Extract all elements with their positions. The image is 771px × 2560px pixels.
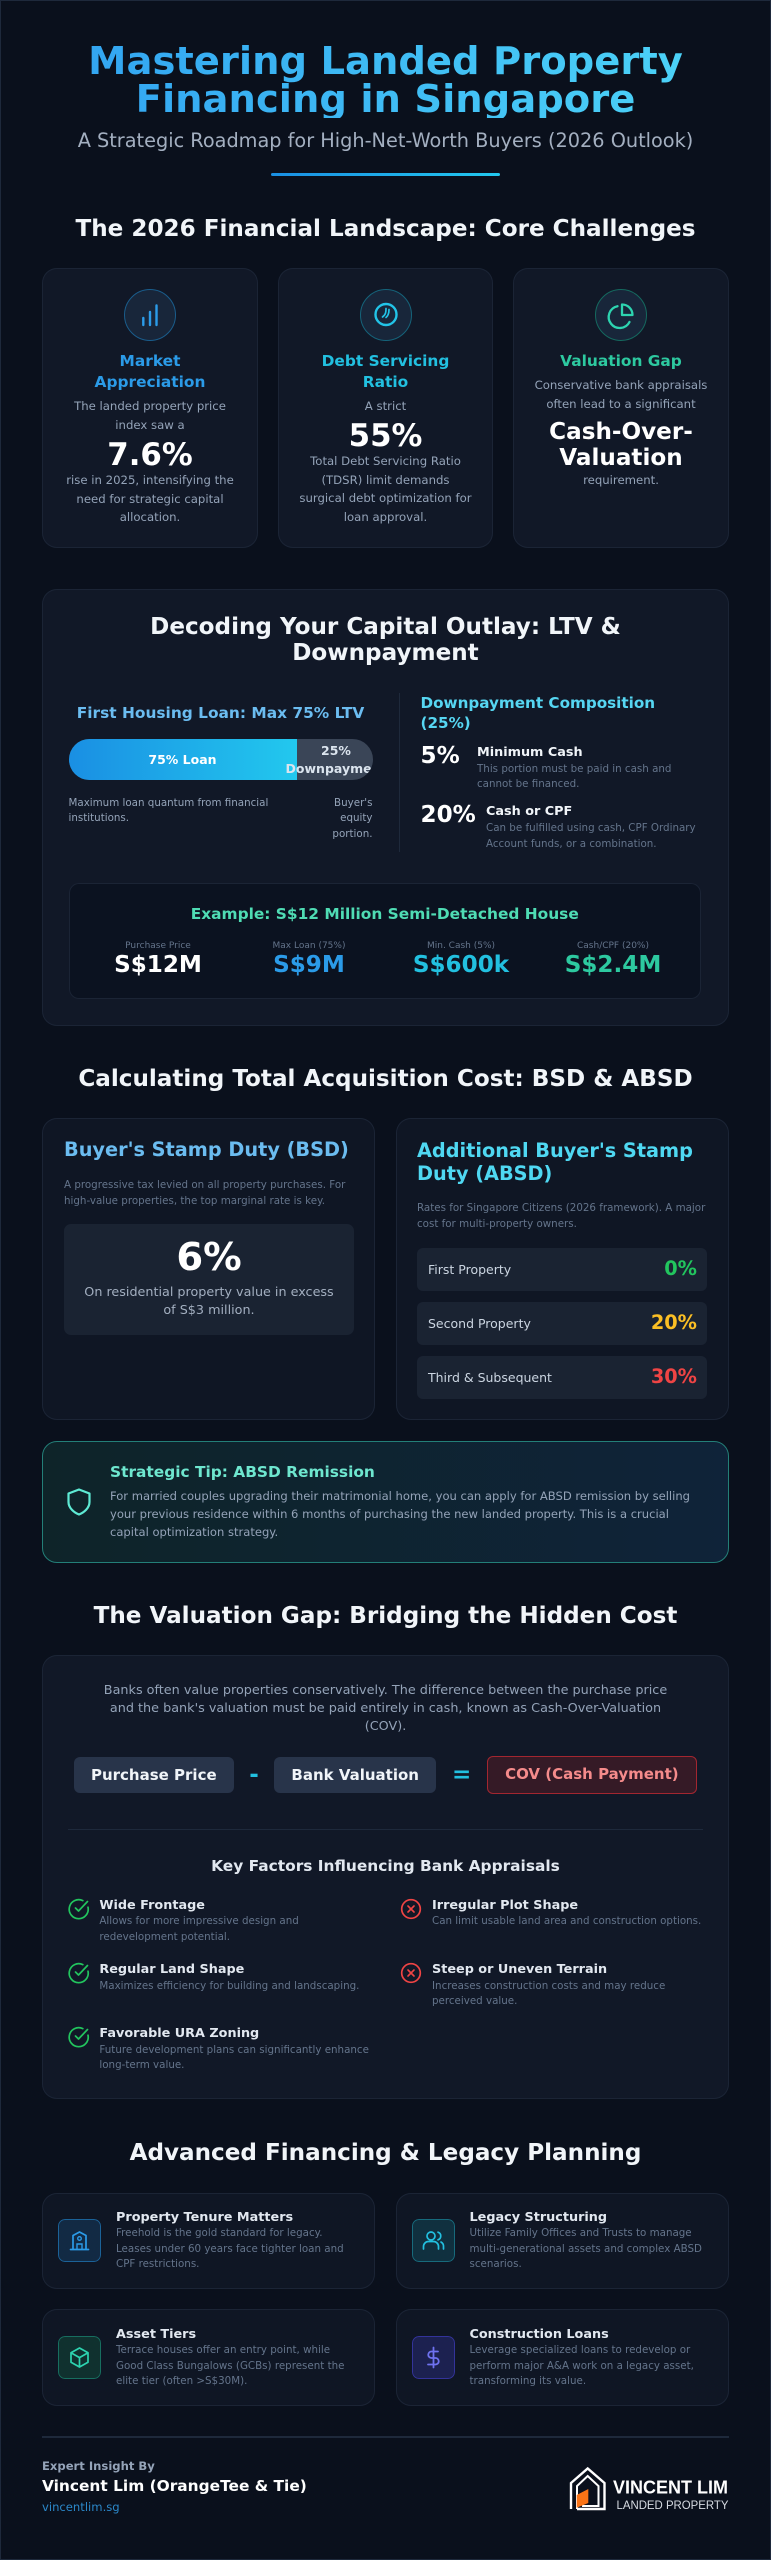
bar segment: downpayment 25%: 25% (321, 743, 351, 758)
card text (116, 2227, 344, 2270)
panel text: high-value properties, the top marginal rate is key. (64, 1194, 325, 1206)
stat: min cash: S$600k (413, 952, 509, 978)
factor: steep terrain: Increases construction costs and may reduce (432, 1980, 665, 1992)
rate row: second property: 20% (651, 1311, 697, 1334)
panel: BSD (42, 1118, 375, 1420)
item: cash or cpf: Can be fulfilled using cash, CPF Ordinary (486, 822, 696, 834)
icon: shield (67, 1488, 91, 1516)
card text: Terrace houses offer an entry point, while (116, 2344, 330, 2356)
panel title (417, 1138, 693, 1184)
factor: wide frontage: Allows for more impressive design and (99, 1915, 299, 1927)
note: equity (332, 796, 372, 840)
icon: check (68, 1962, 90, 1984)
statistic: 55% (349, 418, 422, 454)
icon: gauge (360, 289, 412, 341)
formula: equals: = (452, 1762, 471, 1788)
card text: A strict (365, 399, 406, 413)
formula: minus: - (249, 1762, 259, 1788)
header accent line (271, 173, 500, 176)
subheading: LTV: First Housing Loan: Max 75% LTV (77, 704, 364, 722)
card title (94, 352, 205, 391)
icon: people (412, 2219, 455, 2262)
factor: favorable zoning: Favorable URA Zoning (99, 2026, 259, 2041)
note: equity: portion. (332, 828, 372, 840)
factor: irregular plot (400, 1898, 701, 1927)
card text: rise in 2025, intensifying the (66, 473, 234, 487)
factor: favorable zoning: long-term value. (99, 2059, 184, 2071)
rate row: first property (417, 1248, 707, 1291)
statistic (549, 419, 693, 471)
subheading: key factors: Key Factors Influencing Bank Appraisals (211, 1857, 560, 1875)
title: Mastering Landed Property (88, 39, 683, 84)
card title: Valuation Gap (560, 352, 682, 370)
footer: author (42, 2458, 342, 2518)
panel text: A progressive tax levied on all property purchases. For (64, 1179, 345, 1191)
rate row: first property: 0% (664, 1257, 697, 1280)
note: equity: equity (340, 812, 372, 824)
stat: cash or cpf: S$2.4M (565, 952, 661, 978)
card text (470, 2343, 694, 2390)
card text: scenarios. (470, 2258, 522, 2270)
title: Financing in Singapore (136, 76, 635, 122)
rate row: third property: Third & Subsequent (428, 1370, 552, 1384)
panel: legacy structuring (396, 2193, 729, 2289)
intro text: and the bank's valuation must be paid entirely in cash, known as Cash-Over-Valuation (110, 1701, 661, 1716)
factor: irregular plot: Can limit usable land area and construction options. (432, 1915, 701, 1927)
factor: irregular plot: Irregular Plot Shape (432, 1898, 578, 1913)
stat: min cash (413, 941, 510, 978)
tip text (110, 1489, 690, 1539)
panel: ABSD (396, 1118, 729, 1420)
stat: max loan: Max Loan (75%) (273, 941, 345, 951)
formula: cov result: COV (Cash Payment) (505, 1765, 679, 1783)
factor: wide frontage (68, 1898, 299, 1943)
panel: debt servicing ratio (278, 268, 493, 548)
statistic: 20%: 20% (420, 802, 476, 828)
formula: bank valuation (274, 1757, 436, 1793)
stat: max loan (273, 941, 345, 978)
subheading: composition (420, 694, 655, 732)
statistic: Valuation (559, 445, 683, 471)
panel text (64, 1179, 346, 1206)
icon: dollar (412, 2336, 455, 2379)
card text: Utilize Family Offices and Trusts to manage (470, 2227, 692, 2239)
author label: Expert Insight By (42, 2459, 155, 2473)
stat: purchase price: Purchase Price (125, 941, 191, 951)
card text: Good Class Bungalows (GCBs) represent the (116, 2360, 344, 2372)
bar segment: loan 75%: 75% Loan (148, 752, 217, 767)
panel: capital outlay (42, 589, 729, 1026)
card text (74, 399, 226, 432)
formula: purchase price (74, 1757, 234, 1793)
heading: advanced financing: Advanced Financing & Legacy Planning (130, 2140, 641, 2166)
bar segment: downpayment 25% (286, 743, 372, 776)
card text (470, 2226, 702, 2273)
card title (322, 352, 449, 391)
intro text: (COV). (365, 1719, 406, 1734)
panel title: Duty (ABSD) (417, 1162, 552, 1184)
statistic: Cash-Over- (549, 419, 693, 445)
rate row: second property (417, 1302, 707, 1345)
rate row: second property: Second Property (428, 1316, 531, 1331)
author website: vincentlim.sg (42, 2500, 120, 2514)
icon: check (68, 2026, 90, 2048)
card title: Appreciation (95, 373, 205, 391)
callout: strategic tip (42, 1441, 729, 1563)
note: loan: Maximum loan quantum from financial (68, 796, 268, 808)
factor: wide frontage: redevelopment potential. (99, 1931, 230, 1943)
card text: loan approval. (344, 510, 427, 524)
panel: property tenure (42, 2193, 375, 2289)
card text (535, 378, 707, 411)
card text: Conservative bank appraisals (535, 378, 707, 392)
card text: index saw a (115, 418, 185, 432)
factor: favorable zoning (68, 2026, 369, 2071)
card text: CPF restrictions. (116, 2258, 199, 2270)
card text: requirement. (583, 473, 659, 487)
card title: Debt Servicing (322, 352, 449, 370)
card text: need for strategic capital (76, 492, 224, 506)
tip text: capital optimization strategy. (110, 1525, 278, 1539)
card title: Asset Tiers (116, 2327, 196, 2342)
stat: purchase price (114, 941, 202, 978)
card title: Property Tenure Matters (116, 2210, 293, 2225)
heading: capital outlay (150, 614, 621, 666)
stat: max loan: S$9M (273, 952, 345, 978)
card text (116, 2343, 344, 2390)
logo: Vincent Lim Landed Property: VINCENT LIM (613, 2478, 728, 2498)
note: equity: Buyer's (334, 796, 372, 808)
statistic: 7.6% (107, 437, 193, 473)
intro text (104, 1683, 667, 1734)
card text: often lead to a significant (546, 397, 696, 411)
tip text: your previous residence within 6 months of purchasing the new landed property. This is a crucial (110, 1507, 669, 1521)
rate row: third property: 30% (651, 1364, 697, 1388)
author name: Vincent Lim (OrangeTee & Tie) (42, 2477, 307, 2495)
card text: allocation. (120, 510, 180, 524)
note: loan (68, 796, 268, 824)
logo: Vincent Lim Landed Property (565, 2462, 735, 2514)
logo: Vincent Lim Landed Property: LANDED PROPERTY (616, 2498, 728, 2512)
card text: (TDSR) limit demands (321, 473, 450, 487)
panel: valuation gap (513, 268, 729, 548)
icon: cube (58, 2336, 101, 2379)
card text: Freehold is the gold standard for legacy. (116, 2227, 322, 2239)
subheading: composition: (25%) (420, 714, 471, 732)
icon: cross (400, 1962, 422, 1984)
bar segment: loan 75% (68, 739, 296, 780)
card text (299, 454, 472, 524)
item: minimum cash: This portion must be paid in cash and (477, 762, 671, 774)
card text: surgical debt optimization for (299, 491, 472, 505)
icon: check (68, 1898, 90, 1920)
stat: cash or cpf: Cash/CPF (20%) (577, 941, 649, 951)
factor: regular land shape: Maximizes efficiency for building and landscaping. (99, 1980, 359, 1992)
card text: elite tier (often >S$30M). (116, 2375, 247, 2387)
factor: wide frontage: Wide Frontage (99, 1898, 205, 1913)
card text: perform major A&A work on a legacy asset, (470, 2360, 694, 2372)
heading: capital outlay: Downpayment (292, 640, 479, 666)
callout: 6% rate (64, 1224, 354, 1335)
panel title: Buyer's Stamp Duty (BSD) (64, 1138, 349, 1161)
callout: 6% rate: of S$3 million. (163, 1303, 255, 1318)
panel text: cost for multi-property owners. (417, 1218, 577, 1230)
panel: asset tiers (42, 2309, 375, 2406)
item: cash or cpf (486, 804, 696, 850)
card text (66, 473, 234, 524)
panel: market appreciation (42, 268, 258, 548)
item: cash or cpf: Account funds, or a combination. (486, 838, 657, 850)
heading: acquisition cost: Calculating Total Acquisition Cost: BSD & ABSD (78, 1066, 693, 1092)
formula: cov result (487, 1756, 697, 1794)
card text: transforming its value. (470, 2375, 586, 2387)
heading: valuation gap: The Valuation Gap: Bridging the Hidden Cost (94, 1603, 677, 1629)
card text: The landed property price (74, 399, 226, 413)
rate row: first property: First Property (428, 1262, 511, 1277)
card title: Legacy Structuring (470, 2210, 607, 2225)
card text: Leverage specialized loans to redevelop or (470, 2344, 690, 2356)
factor: steep terrain (400, 1962, 665, 2007)
formula: bank valuation: Bank Valuation (291, 1766, 419, 1784)
icon: bar chart (124, 289, 176, 341)
stat: min cash: Min. Cash (5%) (427, 941, 495, 951)
icon: cross (400, 1898, 422, 1920)
callout: 6% rate: On residential property value in excess (84, 1285, 334, 1300)
icon: tenure house (58, 2219, 101, 2262)
panel: worked example (68, 883, 701, 999)
stat: purchase price: S$12M (114, 952, 202, 978)
intro text: Banks often value properties conservatively. The difference between the purchase price (104, 1683, 667, 1698)
formula: purchase price: Purchase Price (91, 1766, 217, 1784)
rate row: third property (417, 1356, 707, 1399)
example heading: Example: S$12 Million Semi-Detached House (191, 905, 579, 923)
panel: construction loans (396, 2309, 729, 2406)
panel text (417, 1202, 706, 1230)
item: minimum cash (477, 745, 671, 790)
icon: pie chart (595, 289, 647, 341)
heading: capital outlay: Decoding Your Capital Outlay: LTV & (150, 614, 621, 640)
note: loan: institutions. (68, 812, 129, 824)
card title: Ratio (363, 373, 408, 391)
bar chart: loan split (68, 739, 372, 780)
panel: valuation gap detail (42, 1655, 729, 2099)
callout: 6% rate: 6% (176, 1235, 242, 1280)
factor: regular land shape: Regular Land Shape (99, 1962, 244, 1977)
tip text: For married couples upgrading their matrimonial home, you can apply for ABSD remission by selling (110, 1489, 690, 1503)
panel text: Rates for Singapore Citizens (2026 framework). A major (417, 1202, 705, 1214)
factor: steep terrain: Steep or Uneven Terrain (432, 1962, 607, 1977)
subtitle: A Strategic Roadmap for High-Net-Worth Buyers (2026 Outlook) (78, 129, 693, 152)
card text: Total Debt Servicing Ratio (310, 454, 461, 468)
item: minimum cash: Minimum Cash (477, 745, 583, 760)
subheading: composition: Downpayment Composition (420, 694, 655, 712)
title (0, 43, 771, 118)
card title: Market (120, 352, 180, 370)
item: cash or cpf: Cash or CPF (486, 804, 572, 819)
statistic: 5%: 5% (420, 743, 460, 769)
card title: Construction Loans (470, 2327, 609, 2342)
factor: steep terrain: perceived value. (432, 1995, 517, 2007)
stat: cash or cpf (565, 941, 661, 978)
factor: regular land shape (68, 1962, 359, 1992)
tip title: Strategic Tip: ABSD Remission (110, 1463, 375, 1481)
card text: Leases under 60 years face tighter loan and (116, 2243, 344, 2255)
item: minimum cash: cannot be financed. (477, 778, 579, 790)
factor: favorable zoning: Future development plans can significantly enhance (99, 2044, 369, 2056)
heading: core challenges: The 2026 Financial Landscape: Core Challenges (75, 216, 696, 242)
card text: multi-generational assets and complex ABSD (470, 2243, 702, 2255)
panel title: Additional Buyer's Stamp (417, 1138, 693, 1162)
